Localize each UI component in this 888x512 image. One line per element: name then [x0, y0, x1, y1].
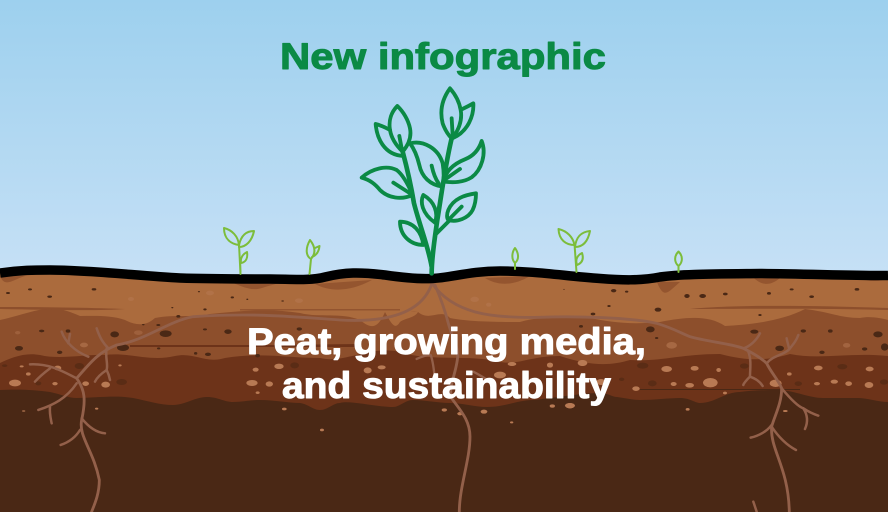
sky background	[0, 0, 888, 290]
light lumps	[385, 312, 418, 326]
leaf: right	[443, 141, 484, 182]
soil layer: subsoil	[0, 309, 888, 380]
roots: right system	[432, 283, 818, 512]
leaf: top left large	[390, 106, 410, 152]
icon: central plant	[362, 88, 484, 273]
leaf: top right large	[441, 88, 461, 138]
darker patches under surface	[0, 276, 888, 293]
title: New infographic	[280, 36, 606, 77]
roots: left system	[30, 283, 432, 512]
soil layer: topsoil	[0, 270, 888, 340]
subtitle line 1: Peat, growing media,	[247, 321, 646, 362]
mid-tone clods	[2, 362, 299, 385]
roots: centre taproot	[417, 285, 490, 512]
leaf: lower right	[447, 193, 476, 221]
soil cross-section	[0, 270, 888, 512]
leaf: lower left	[400, 222, 423, 245]
ground surface line	[0, 270, 888, 280]
seedling: left small	[307, 240, 320, 274]
seedling: far left	[224, 228, 254, 274]
leaf: left	[362, 168, 413, 198]
leaf: lower centre	[422, 195, 436, 223]
soil layer: clay band	[0, 350, 888, 420]
dark specks	[6, 288, 302, 357]
soil layer: deep peat	[0, 390, 888, 512]
seedling: far right	[675, 252, 682, 272]
soil streaks	[0, 306, 888, 390]
pale pebbles	[9, 291, 324, 431]
seedling: centre right tiny	[512, 248, 518, 269]
subtitle line 2: and sustainability	[282, 365, 611, 406]
subtitle	[247, 321, 646, 406]
leaf: centre	[410, 143, 444, 187]
seedling: right	[558, 229, 590, 272]
